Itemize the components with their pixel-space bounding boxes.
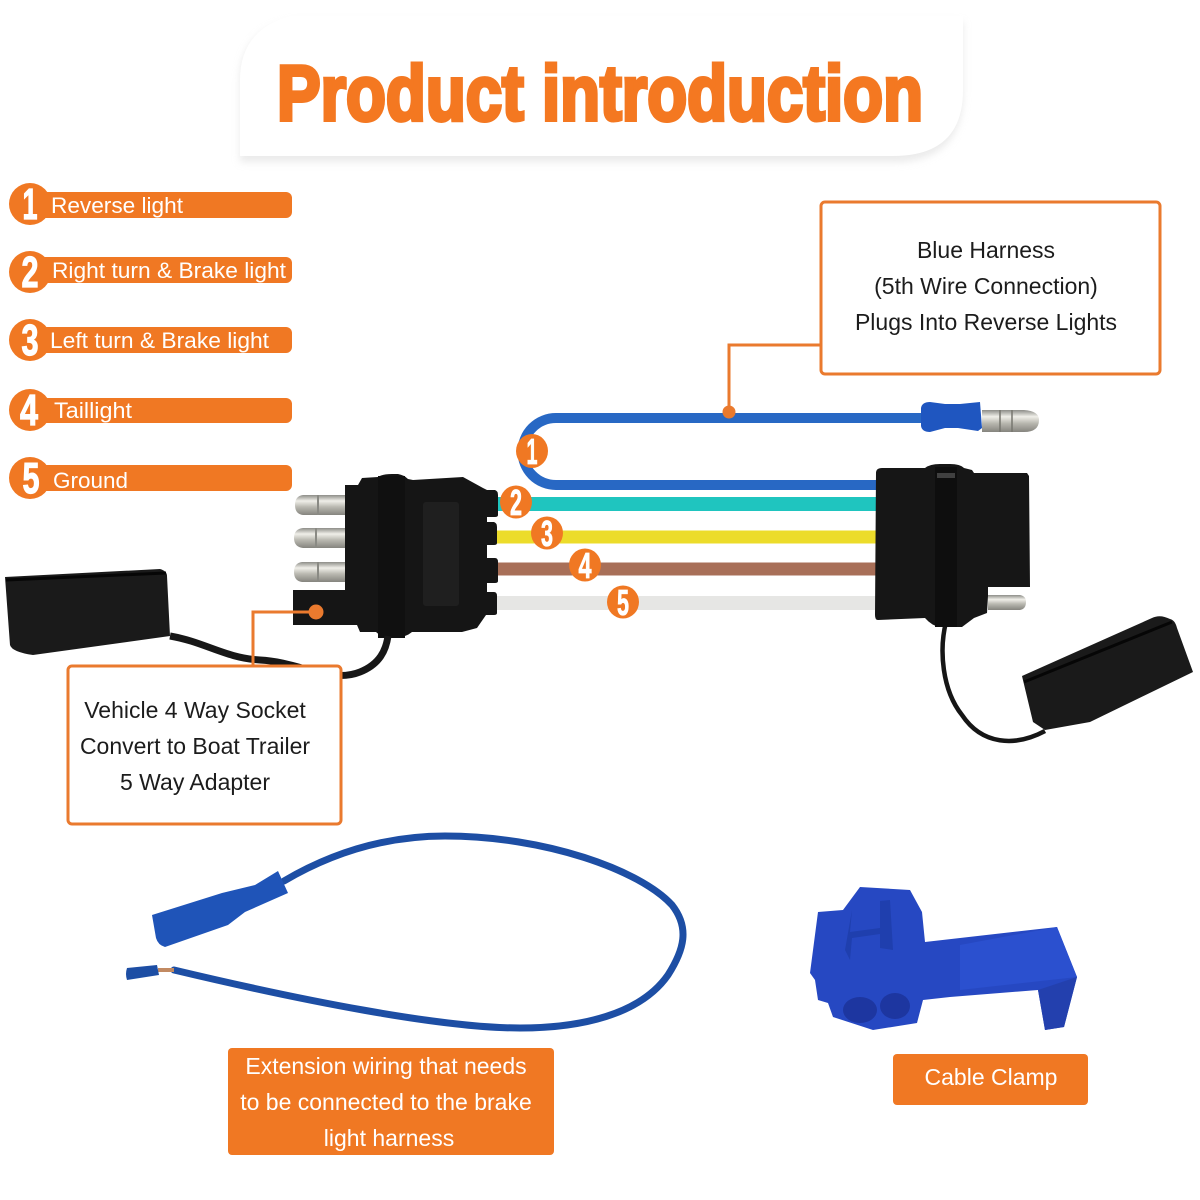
wire: blue	[522, 418, 925, 485]
wire: teal	[495, 497, 880, 511]
callout: blue harness: Plugs Into Reverse Lights	[855, 309, 1117, 335]
badge 1: 1	[526, 431, 538, 472]
cable clamp	[810, 887, 1077, 1030]
legend item 3	[9, 316, 292, 365]
callout: blue harness: Blue Harness	[917, 237, 1055, 263]
callout: blue harness	[821, 202, 1160, 374]
stripped wire tip	[126, 965, 174, 980]
extension connector	[152, 871, 288, 947]
legend item 5: Ground	[53, 468, 128, 493]
right weather cap	[1022, 616, 1193, 730]
callout: vehicle socket: Vehicle 4 Way Socket	[84, 697, 306, 723]
legend item 5	[9, 454, 292, 503]
legend item 1: Reverse light	[51, 193, 183, 218]
blue bullet terminal	[921, 402, 1039, 432]
title: Product introduction	[277, 49, 923, 137]
left weather cap	[5, 569, 388, 676]
legend item 1	[9, 180, 292, 229]
clamp wire holes	[843, 993, 910, 1023]
badge 2: 2	[510, 482, 522, 523]
extension wiring	[126, 836, 683, 1028]
coloured wires	[495, 418, 925, 603]
badge 4: 4	[578, 545, 592, 586]
label: extension wiring	[228, 1048, 554, 1155]
leader line: socket callout	[253, 612, 316, 665]
legend item 3: Left turn & Brake light	[50, 328, 269, 353]
legend item 4	[9, 386, 292, 435]
label: cable clamp: Cable Clamp	[925, 1064, 1057, 1090]
legend: wire functions	[9, 180, 292, 503]
wire number badges	[500, 431, 639, 623]
title panel	[240, 16, 963, 162]
callout: blue harness: (5th Wire Connection)	[874, 273, 1098, 299]
right cover cord	[943, 622, 1045, 741]
badge 5: 5	[617, 582, 629, 623]
legend item 2: 2	[22, 248, 38, 297]
badge 2	[500, 482, 532, 523]
wire: brown	[495, 562, 880, 576]
badge 3	[531, 513, 563, 554]
callout: vehicle socket: 5 Way Adapter	[120, 769, 270, 795]
legend item 5: 5	[22, 454, 40, 503]
callout: vehicle socket	[68, 666, 341, 824]
legend item 2: Right turn & Brake light	[52, 258, 286, 283]
badge 3: 3	[541, 513, 553, 554]
badge 4	[569, 545, 601, 586]
legend item 2	[9, 248, 292, 297]
legend item 4: Taillight	[54, 398, 132, 423]
wire: white	[495, 596, 880, 610]
socket marker dot	[308, 604, 324, 620]
right connector pin	[988, 595, 1026, 610]
legend item 1: 1	[22, 180, 38, 229]
badge 5	[607, 582, 639, 623]
leader line: blue harness	[722, 345, 820, 418]
label: extension wiring: light harness	[324, 1125, 454, 1151]
right 5-way connector	[875, 464, 1030, 627]
left connector pins	[294, 495, 346, 582]
wire: yellow	[495, 530, 880, 544]
legend item 4: 4	[20, 386, 38, 435]
label: cable clamp	[893, 1054, 1088, 1105]
label: extension wiring: Extension wiring that needs	[245, 1053, 527, 1079]
left 4-way connector	[293, 474, 498, 638]
badge 1	[516, 431, 548, 472]
label: extension wiring: to be connected to the brake	[240, 1089, 532, 1115]
callout: vehicle socket: Convert to Boat Trailer	[80, 733, 310, 759]
legend item 3: 3	[22, 316, 38, 365]
